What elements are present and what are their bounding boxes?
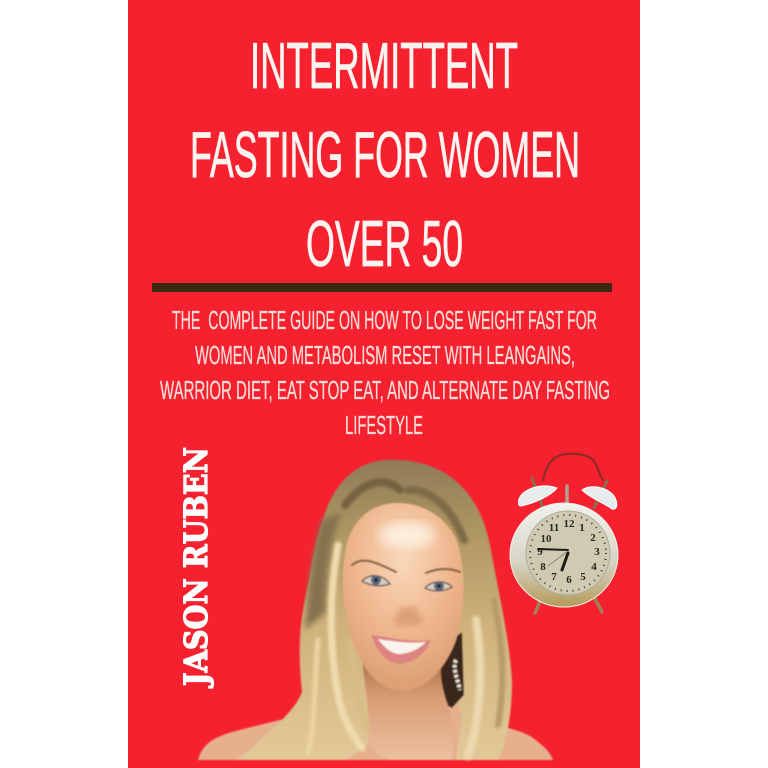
numerals: 1	[579, 522, 585, 534]
eyebrows	[352, 561, 460, 573]
mouth	[371, 635, 431, 664]
bell posts	[532, 478, 607, 508]
clock body	[510, 503, 618, 607]
numerals: 11	[549, 522, 559, 534]
shoulders and chest	[198, 690, 553, 760]
numerals: 4	[591, 561, 597, 573]
hair shading left	[305, 512, 342, 630]
face	[343, 503, 464, 691]
author name: JASON RUBEN	[177, 447, 215, 689]
title: INTERMITTENT	[250, 29, 518, 102]
eyes	[362, 575, 452, 591]
subtitle	[160, 307, 610, 440]
handle	[543, 454, 604, 481]
numerals: 6	[566, 574, 572, 586]
legs	[535, 593, 602, 613]
forehead shine	[379, 522, 435, 548]
numerals: 3	[594, 546, 600, 558]
numerals	[537, 518, 600, 586]
alarm clock	[510, 454, 618, 613]
earring	[455, 660, 460, 690]
numerals: 12	[564, 518, 575, 530]
neck	[362, 655, 454, 760]
numerals: 10	[540, 533, 552, 545]
dark hair behind neck	[425, 632, 464, 708]
numerals: 7	[551, 571, 557, 583]
hair mass	[236, 460, 512, 760]
clock hands	[538, 549, 568, 570]
subtitle: LIFESTYLE	[345, 412, 423, 440]
title: OVER 50	[306, 207, 463, 280]
numerals: 2	[590, 532, 596, 544]
nose	[392, 606, 424, 627]
numerals: 5	[580, 571, 586, 583]
numerals: 9	[537, 546, 543, 558]
clock face	[526, 511, 610, 595]
divider bar	[152, 283, 612, 292]
portrait of smiling blonde woman	[198, 460, 553, 760]
bells	[518, 486, 557, 506]
numerals: 8	[540, 561, 546, 573]
red cover background	[128, 0, 640, 768]
title	[190, 29, 580, 280]
hair highlights	[308, 482, 502, 756]
